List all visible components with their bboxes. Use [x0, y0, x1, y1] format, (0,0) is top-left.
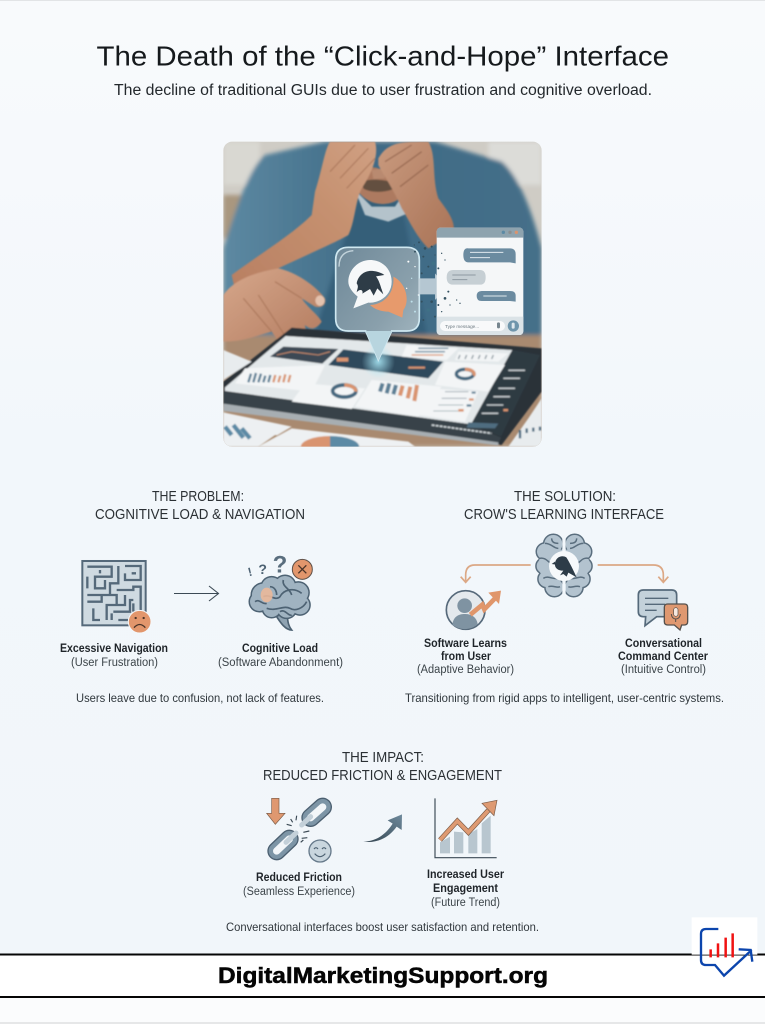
title: The Death of the “Click-and-Hope” Interface [96, 40, 669, 72]
footer website text: DigitalMarketingSupport.org [218, 963, 548, 988]
label: increased user engagement [427, 869, 504, 909]
subtitle: The decline of traditional GUIs due to user frustration and cognitive overload. [114, 82, 652, 99]
caption: impact: Conversational interfaces boost user satisfaction and retention. [226, 920, 539, 934]
heading: the problem: THE PROBLEM: [152, 489, 244, 505]
label: reduced friction: Reduced Friction [256, 872, 342, 884]
sub-element: tablet [223, 328, 542, 445]
sub-element: glass callout with crow logo [336, 247, 419, 378]
heading: the impact: REDUCED FRICTION & ENGAGEMENT [263, 768, 502, 784]
icon: logo chart in speech bubble [692, 917, 757, 976]
sub-element: right hand on face [378, 142, 454, 248]
sub-element: dashboard cards [270, 347, 338, 364]
arrow: friction to engagement [363, 814, 402, 842]
heading: the problem [95, 489, 305, 523]
arrow: brain to software learns [461, 565, 531, 582]
label: excessive navigation: (User Frustration) [71, 657, 158, 669]
sub-element: left hand on face [232, 142, 376, 290]
icon: maze with sad face [82, 561, 151, 633]
caption: solution: Transitioning from rigid apps to intelligent, user-centric systems. [405, 691, 724, 705]
label: increased user engagement: Engagement [433, 883, 498, 895]
label: cognitive load [218, 643, 343, 669]
icon: confused brain: ! [246, 565, 254, 579]
hero image: frustrated man at tablet with conversational interface [223, 142, 542, 448]
label: conversational command center: Conversational [625, 638, 702, 650]
footer band [0, 954, 765, 1024]
heading: the solution: THE SOLUTION: [514, 489, 616, 505]
label: excessive navigation: Excessive Navigation [60, 643, 168, 655]
sub-element: pointing hand [223, 268, 325, 348]
panel: the impact [226, 750, 539, 934]
icon: confused brain: ? [258, 561, 267, 577]
icon: user with growth arrow [446, 591, 501, 629]
icon: brain with crow [537, 533, 591, 597]
label: increased user engagement: (Future Trend) [431, 897, 500, 909]
label: excessive navigation [60, 643, 168, 669]
arrow: brain to conversational center [598, 565, 668, 582]
caption: problem: Users leave due to confusion, not lack of features. [76, 691, 324, 705]
label: software learns from user [417, 638, 514, 676]
icon: confused brain [246, 552, 312, 630]
icon: broken chain with smiley [267, 798, 331, 862]
label: conversational command center: (Intuitive Control) [621, 664, 706, 676]
arrow: navigation leads to cognitive load [174, 586, 218, 601]
heading: the impact [263, 750, 502, 784]
panel: the solution [405, 489, 724, 705]
icon: chat with microphone [638, 590, 688, 630]
icon: growth chart [435, 798, 497, 858]
label: cognitive load: (Software Abandonment) [218, 657, 343, 669]
label: reduced friction: (Seamless Experience) [243, 886, 355, 898]
label: cognitive load: Cognitive Load [242, 643, 318, 655]
label: software learns from user: (Adaptive Behavior) [417, 664, 514, 676]
sub-element: chat window [418, 228, 523, 335]
panel: the problem [60, 489, 343, 705]
heading: the impact: THE IMPACT: [342, 750, 424, 766]
sub-element: shirt [223, 142, 542, 348]
label: software learns from user: from User [441, 651, 491, 663]
label: increased user engagement: Increased User [427, 869, 504, 881]
heading: the solution: CROW'S LEARNING INTERFACE [464, 507, 664, 523]
label: software learns from user: Software Learns [424, 638, 507, 650]
label: conversational command center: Command Center [618, 651, 708, 663]
icon: confused brain: ? [273, 552, 287, 579]
sub-element: dissolving particles [406, 241, 461, 321]
label: conversational command center [618, 638, 708, 676]
heading: the problem: COGNITIVE LOAD & NAVIGATION [95, 507, 305, 523]
sub-element: papers on desk [223, 350, 252, 380]
sub-element: chat window: Type message... [445, 324, 479, 329]
heading: the solution [464, 489, 664, 523]
label: reduced friction [243, 872, 355, 898]
